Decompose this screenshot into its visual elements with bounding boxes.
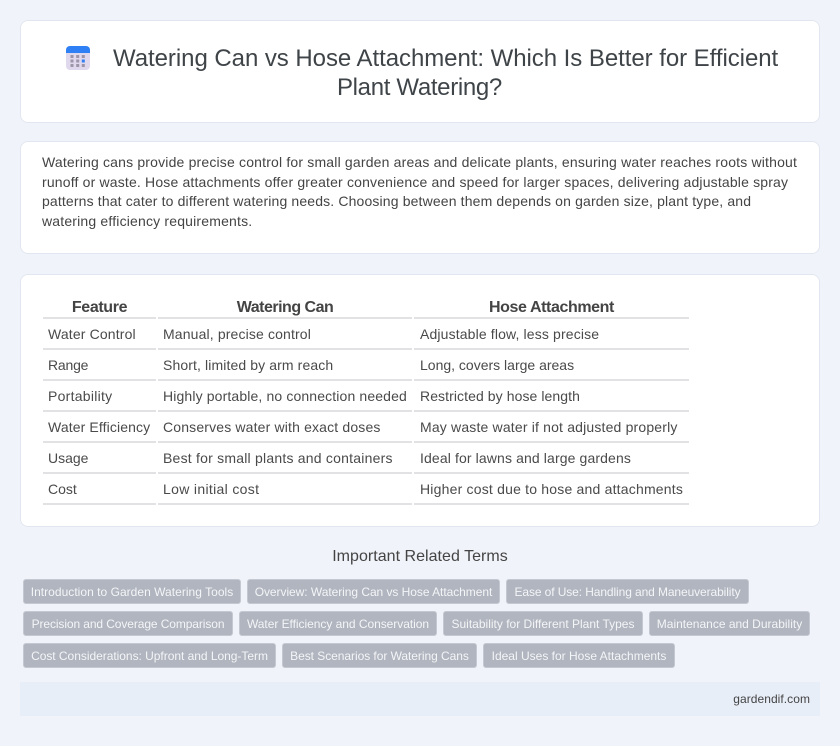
text block: description: patterns that cater to different watering needs. Choosing between them depends on garden size, plant type, and (42, 193, 751, 209)
tag (483, 643, 675, 668)
panel: comparison table (20, 274, 820, 527)
panel: description (20, 141, 820, 254)
tag (649, 611, 810, 636)
text block: description: Watering cans provide precise control for small garden areas and delicate plants, ensuring water reaches roots without (42, 154, 797, 170)
table: comparison: May waste water if not adjusted properly (420, 419, 678, 435)
tag: Ideal Uses for Hose Attachments (492, 649, 666, 663)
row: Range: Range (48, 357, 88, 373)
table: comparison: Highly portable, no connection needed (163, 388, 407, 404)
text block: description: runoff or waste. Hose attachments offer greater convenience and speed for larger spaces, delivering adjustable spray (42, 174, 788, 190)
tag (23, 643, 276, 668)
title: Watering Can vs Hose Attachment: Which Is Better for Efficient (113, 45, 778, 72)
tag: Water Efficiency and Conservation (247, 617, 429, 631)
footer bar (20, 682, 820, 716)
row: Water Control: Water Control (48, 326, 136, 342)
title: Plant Watering? (337, 74, 502, 101)
panel: header (20, 20, 820, 123)
header: Watering Can: Watering Can (237, 299, 333, 316)
tag (23, 611, 233, 636)
table: comparison: Ideal for lawns and large gardens (420, 450, 631, 466)
row: Usage: Usage (48, 450, 88, 466)
title (113, 45, 778, 101)
tag: Ease of Use: Handling and Maneuverability (514, 585, 741, 599)
tag (443, 611, 643, 636)
tag: Best Scenarios for Watering Cans (290, 649, 469, 663)
row: Water Efficiency: Water Efficiency (48, 419, 150, 435)
table: comparison: Low initial cost (163, 481, 259, 497)
table: comparison: Long, covers large areas (420, 357, 574, 373)
text block: description: watering efficiency requirements. (42, 213, 252, 229)
header: Feature: Feature (72, 299, 127, 316)
table: comparison: Short, limited by arm reach (163, 357, 333, 373)
row: Portability: Portability (48, 388, 112, 404)
icon: calendar (66, 46, 90, 70)
row: Cost: Cost (48, 481, 77, 497)
table: comparison: Adjustable flow, less precise (420, 326, 599, 342)
tag: Suitability for Different Plant Types (452, 617, 634, 631)
tag (239, 611, 437, 636)
tag (282, 643, 477, 668)
table: comparison: Restricted by hose length (420, 388, 580, 404)
tag (23, 579, 241, 604)
text block: description (42, 154, 797, 229)
tag: Precision and Coverage Comparison (32, 617, 224, 631)
tag (506, 579, 749, 604)
table: comparison: Manual, precise control (163, 326, 311, 342)
tags: related terms (23, 579, 810, 668)
table: comparison: Higher cost due to hose and attachments (420, 481, 683, 497)
table: comparison (43, 299, 689, 505)
table: comparison: Conserves water with exact doses (163, 419, 381, 435)
tag: Maintenance and Durability (657, 617, 802, 631)
tag (247, 579, 500, 604)
heading: related terms: Important Related Terms (332, 548, 508, 565)
header: Hose Attachment: Hose Attachment (489, 299, 614, 316)
footer: site name: gardendif.com (733, 692, 810, 706)
table: comparison: Best for small plants and containers (163, 450, 393, 466)
tag: Introduction to Garden Watering Tools (31, 585, 233, 599)
tag: Overview: Watering Can vs Hose Attachment (255, 585, 492, 599)
tag: Cost Considerations: Upfront and Long-Term (31, 649, 268, 663)
